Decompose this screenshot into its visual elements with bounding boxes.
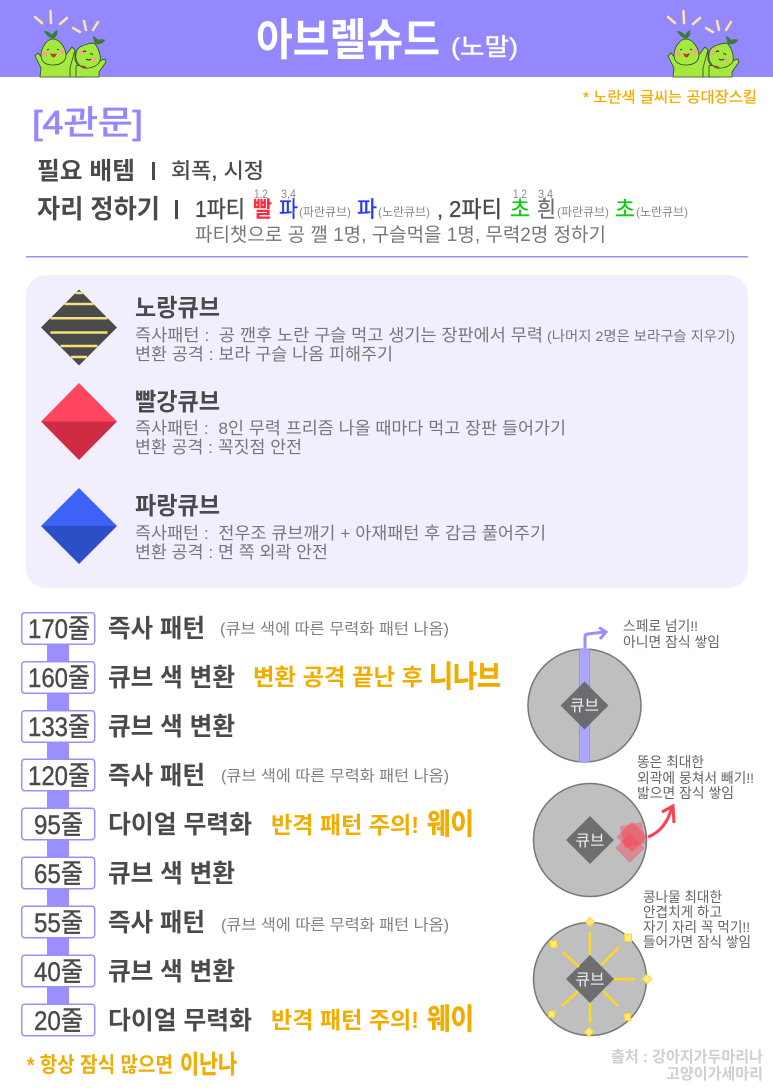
blue cube text: 변환 공격 : 면 쪽 외곽 안전 (135, 543, 328, 562)
red cube text (135, 389, 566, 457)
timeline: 20줄 (34, 1006, 83, 1036)
timeline: 120줄 (28, 761, 90, 791)
timeline: 55줄 (34, 908, 83, 938)
timeline: 65줄 (34, 859, 83, 889)
diagram: dung at edge (534, 754, 754, 896)
required items: 회폭, 시정 (171, 160, 264, 183)
seat assignment: (노란큐브) (636, 205, 688, 219)
yellow cube text: 변환 공격 : 보라 구슬 나옴 피해주기 (135, 345, 393, 364)
diagram: bean sprouts (534, 889, 751, 1036)
blue cube text (135, 493, 546, 562)
yellow cube text: 노랑큐브 (135, 295, 220, 322)
timeline: 웨이 (427, 1003, 474, 1036)
diagram: dung at edge: 큐브 (576, 833, 604, 850)
source credit (611, 1048, 763, 1083)
seat assignment: (파란큐브) (299, 205, 351, 219)
required items: 필요 배템 (37, 158, 135, 185)
seat assignment: 초 (510, 197, 530, 222)
timeline: 133줄 (28, 712, 90, 742)
diagram: sphere jump: 큐브 (570, 698, 599, 715)
timeline: 160줄 (28, 663, 90, 693)
icon: red cube (41, 383, 117, 460)
timeline: 큐브 색 변환 (108, 713, 235, 741)
header band (0, 0, 773, 77)
blue cube text: 즉사패턴 : 전우조 큐브깨기 + 아재패턴 후 감금 풀어주기 (135, 524, 546, 543)
seat assignment: 빨 (253, 197, 272, 222)
panel: cube types (26, 275, 748, 588)
yellow cube text: 즉사패턴 : 공 깬후 노란 구슬 먹고 생기는 장판에서 무력 (135, 326, 543, 345)
yellow cube text (135, 295, 735, 364)
timeline: 큐브 색 변환 (108, 958, 235, 986)
diagram: sphere jump (528, 618, 720, 762)
seat assignment: 흰 (537, 197, 556, 222)
required items (37, 158, 264, 185)
icon: left mascots (35, 11, 106, 77)
source credit: 고양이가세마리 (666, 1065, 763, 1083)
source credit: 출처 : 강아지가두마리나 (611, 1048, 763, 1066)
heading: gate 4: [4관문] (32, 104, 143, 141)
timeline: 웨이 (427, 808, 474, 841)
diagram: sphere jump: 스페로 넘기!! (623, 618, 698, 634)
seat assignment (37, 187, 688, 246)
diagram: bean sprouts: 자기 자리 꼭 먹기!! (643, 919, 750, 935)
diagram: dung at edge: 밟으면 잠식 쌓임 (637, 785, 734, 801)
timeline: (큐브 색에 따른 무력화 패턴 나옴) (221, 916, 449, 934)
timeline: 반격 패턴 주의! (271, 812, 419, 838)
blue cube text: 파랑큐브 (135, 493, 220, 520)
timeline: 95줄 (34, 810, 83, 840)
diagram: sphere jump: 아니면 잠식 쌓임 (623, 634, 720, 650)
seat assignment: 초 (615, 197, 635, 222)
timeline: 즉사 패턴 (108, 762, 205, 790)
title: 아브렐슈드 (256, 16, 440, 65)
seat assignment: 파 (357, 197, 377, 222)
note: always eannana: 이난나 (180, 1051, 237, 1079)
note: always eannana: * 항상 잠식 많으면 (27, 1054, 173, 1077)
seat assignment: (노란큐브) (378, 205, 430, 219)
timeline: 변환 공격 끝난 후 (253, 664, 423, 690)
seat assignment: 3,4 (538, 187, 553, 201)
diagram: bean sprouts: 큐브 (576, 972, 604, 989)
timeline: (큐브 색에 따른 무력화 패턴 나옴) (220, 620, 449, 638)
diagram: bean sprouts: 들어가면 잠식 쌓임 (643, 934, 751, 950)
timeline: 큐브 색 변환 (108, 860, 235, 888)
icon: right mascots (668, 11, 739, 77)
timeline: (큐브 색에 따른 무력화 패턴 나옴) (221, 767, 449, 785)
icon: yellow cube (41, 290, 117, 366)
red cube text: 즉사패턴 : 8인 무력 프리즘 나올 때마다 먹고 장판 들어가기 (135, 419, 566, 438)
diagram: bean sprouts: 콩나물 최대한 (643, 889, 722, 905)
diagram: dung at edge: 외곽에 뭉쳐서 빼기!! (637, 770, 754, 786)
seat assignment: 1,2 (513, 187, 527, 201)
timeline: 즉사 패턴 (108, 909, 205, 937)
diagram: bean sprouts: 안겹치게 하고 (643, 904, 722, 920)
timeline (22, 613, 501, 1036)
timeline: 큐브 색 변환 (108, 664, 235, 692)
seat assignment: 파티챗으로 공 깰 1명, 구슬먹을 1명, 무력2명 정하기 (195, 224, 606, 246)
timeline: 니나브 (429, 661, 501, 694)
note: always eannana (27, 1051, 237, 1079)
seat assignment: 3,4 (281, 187, 296, 201)
seat assignment: 1,2 (254, 187, 268, 201)
seat assignment: 파 (279, 197, 298, 222)
diagram: dung at edge: 똥은 최대한 (637, 754, 704, 770)
red cube text: 빨강큐브 (135, 389, 220, 416)
seat assignment: , (437, 197, 443, 222)
seat assignment: 1파티 (195, 196, 245, 222)
timeline: 다이얼 무력화 (108, 1007, 252, 1035)
timeline: 170줄 (28, 614, 90, 644)
timeline: 40줄 (34, 957, 83, 987)
yellow cube text: (나머지 2명은 보라구슬 지우기) (547, 328, 735, 344)
seat assignment: 2파티 (449, 196, 502, 222)
note: yellow text meaning: * 노란색 글씨는 공대장스킬 (583, 89, 757, 106)
red cube text: 변환 공격 : 꼭짓점 안전 (135, 438, 302, 457)
title: (노말) (451, 34, 518, 61)
seat assignment: 자리 정하기 (37, 194, 160, 224)
icon: blue cube (41, 488, 117, 564)
timeline: 즉사 패턴 (108, 615, 205, 643)
seat assignment: (파란큐브) (557, 205, 609, 219)
timeline: 반격 패턴 주의! (271, 1007, 419, 1033)
timeline: 다이얼 무력화 (108, 811, 252, 839)
